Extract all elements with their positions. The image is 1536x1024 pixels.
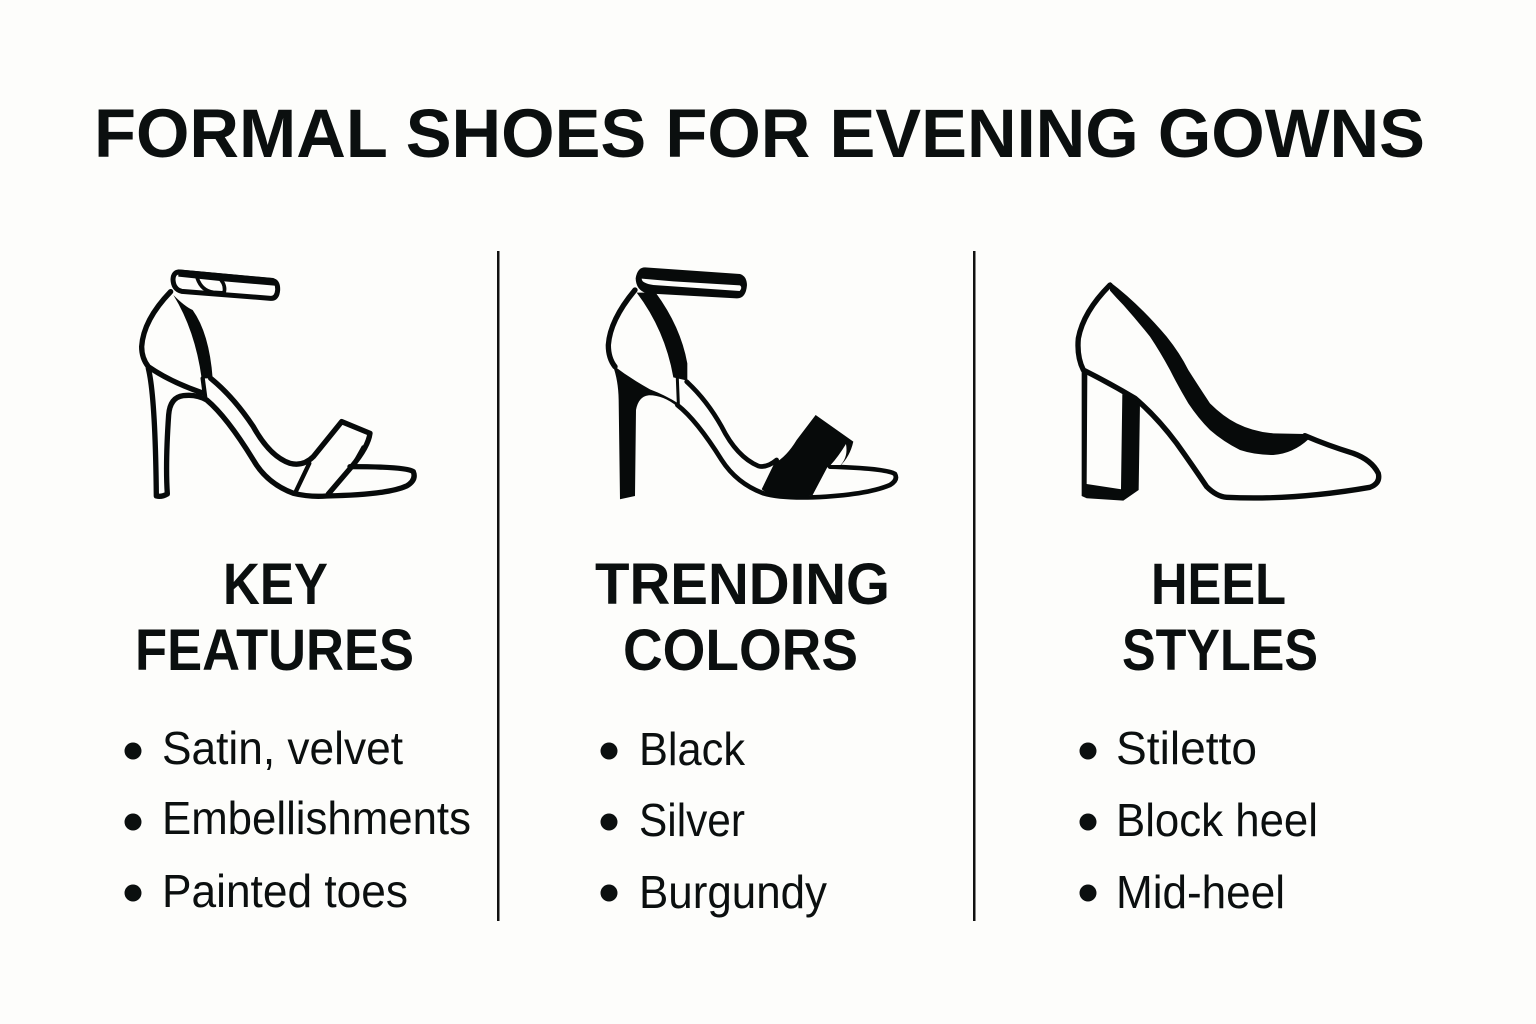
list [124,722,471,917]
list: Mid-heel [1116,866,1285,918]
list: Painted toes [162,865,408,917]
panel: heel styles [1078,282,1379,918]
list: Block heel [1116,794,1318,846]
list: Satin, velvet [162,722,403,774]
list: Embellishments [162,792,471,844]
heading: STYLES [1122,618,1318,683]
panel: trending colors [595,267,896,918]
list: Stiletto [1116,722,1257,774]
heading [135,552,414,683]
list [600,723,827,918]
list: Silver [639,794,745,846]
list: Black [639,723,746,775]
panel: key features [124,269,471,917]
list [1080,722,1318,918]
list: Burgundy [639,866,827,918]
heading: COLORS [623,618,858,683]
heading: TRENDING [595,552,890,617]
heading: KEY [223,552,328,617]
title: FORMAL SHOES FOR EVENING GOWNS [94,95,1425,172]
heading: HEEL [1151,552,1286,617]
icon: sandal with black heel and toe strap [608,267,896,499]
icon: block heel pump [1078,282,1379,501]
heading [1122,552,1318,683]
heading [595,552,890,683]
icon: outlined ankle-strap sandal [142,269,414,496]
heading: FEATURES [135,618,414,683]
